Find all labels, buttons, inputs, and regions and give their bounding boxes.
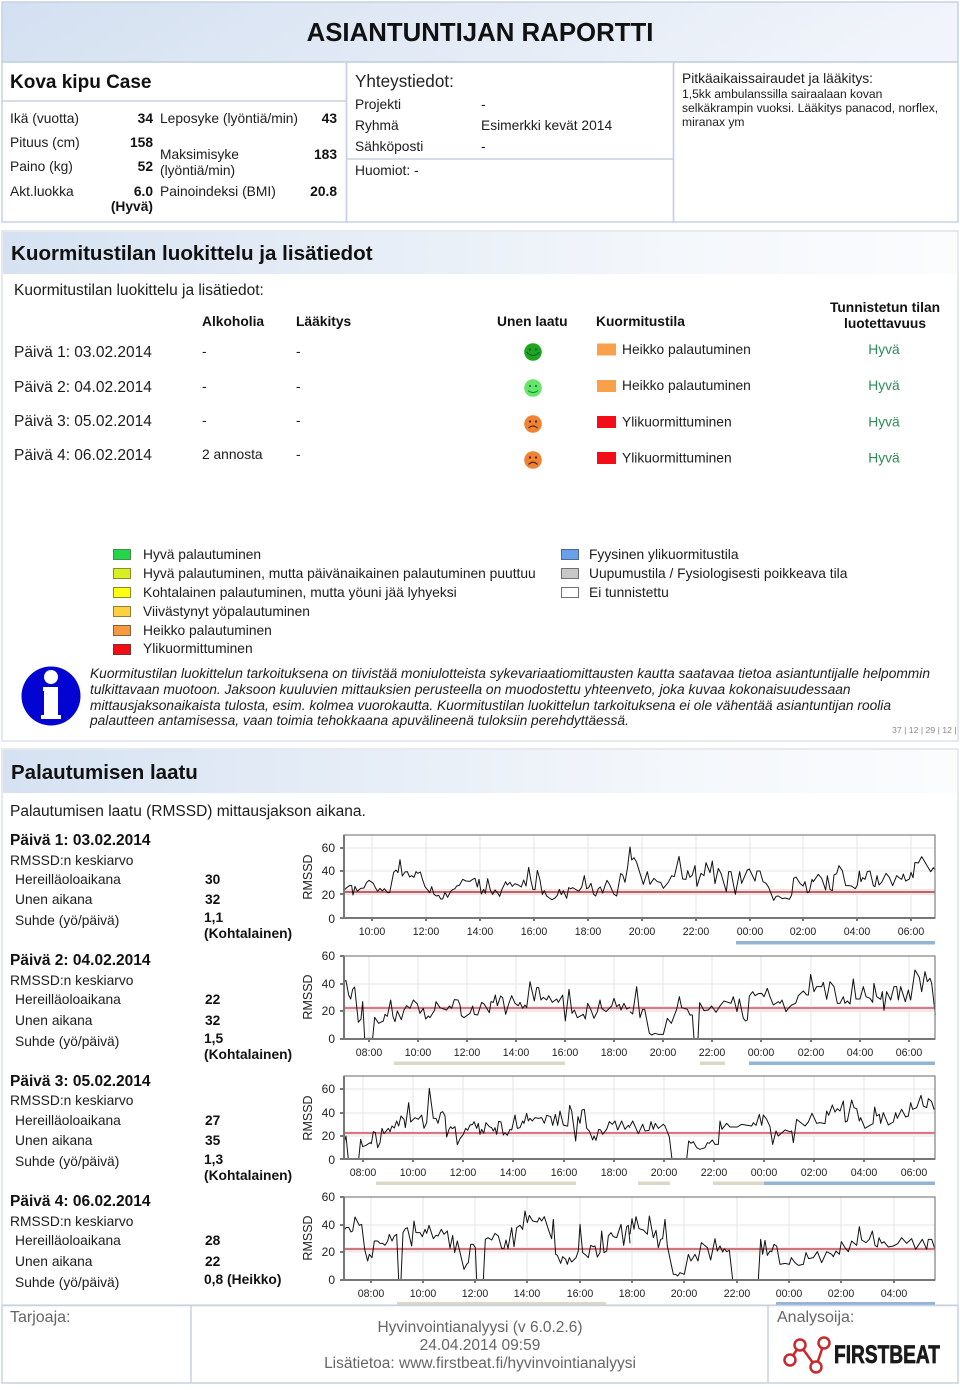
chart: day 4 RMSSD: 10:00: [410, 1288, 436, 1300]
email: Sähköposti: [355, 139, 423, 154]
maximum heart rate: Maksimisyke: [160, 147, 239, 162]
chart: day 2 RMSSD: RMSSD: [301, 974, 315, 1020]
body mass index: Painoindeksi (BMI): [160, 184, 276, 199]
row: day 1: -: [202, 344, 207, 359]
chart: day 3 RMSSD: 04:00: [851, 1167, 877, 1179]
chart: day 1 RMSSD: 20: [322, 888, 335, 902]
day 2 values: [10, 952, 292, 1062]
chart: day 2 RMSSD: 02:00: [798, 1047, 824, 1059]
day 4 values: Unen aikana: [15, 1254, 93, 1269]
maximum heart rate: [160, 147, 337, 178]
legend: recovery states: Viivästynyt yöpalautuminen: [143, 604, 310, 619]
panel: person details: [2, 62, 346, 222]
chart: day 3 RMSSD: 40: [322, 1106, 335, 1120]
section heading: Kuormitustilan luokittelu ja lisätiedot: [11, 242, 373, 265]
row: day 3: Ylikuormittuminen: [622, 414, 732, 430]
activity class: (Hyvä): [111, 199, 153, 214]
row: day 2: Päivä 2: 04.02.2014: [14, 379, 152, 396]
chart: day 2 RMSSD: 0: [328, 1032, 335, 1046]
row: day 3: [14, 413, 900, 433]
day 2 values: Unen aikana: [15, 1013, 93, 1028]
row: day 1: Päivä 1: 03.02.2014: [14, 344, 152, 361]
chart: day 4 RMSSD: 04:00: [881, 1288, 907, 1300]
day 3 values: RMSSD:n keskiarvo: [10, 1093, 134, 1108]
day 2 values: Hereilläoloaikana: [15, 992, 121, 1007]
chart: day 3 RMSSD: [301, 1076, 935, 1185]
report header: [2, 2, 958, 62]
chart: day 3 RMSSD: 08:00: [350, 1167, 376, 1179]
project: [355, 97, 486, 112]
section heading: Palautumisen laatu: [11, 761, 198, 784]
software information: [324, 1319, 636, 1372]
row: day 1: -: [296, 344, 301, 359]
table column headers: Alkoholia: [202, 314, 264, 329]
row: day 1: Hyvä: [868, 342, 900, 357]
chart: day 2 RMSSD: 20:00: [650, 1047, 676, 1059]
day 2 values: 1,5: [204, 1031, 224, 1046]
body mass index: [160, 184, 337, 199]
day 1 values: 30: [205, 872, 221, 887]
legend: other states: Uupumustila / Fysiologisesti poikkeava tila: [589, 566, 848, 581]
row: day 4: Ylikuormittuminen: [622, 450, 732, 466]
chart: day 1 RMSSD: 06:00: [898, 926, 924, 938]
legend: recovery states: Heikko palautuminen: [143, 623, 272, 638]
resting heart rate: 43: [322, 111, 337, 126]
height: 158: [130, 135, 153, 150]
activity class: Akt.luokka: [10, 184, 74, 199]
chart: day 1 RMSSD: 40: [322, 864, 335, 878]
row: day 2: -: [202, 379, 207, 394]
legend: recovery states: Hyvä palautuminen: [143, 547, 261, 562]
day 3 values: [10, 1073, 292, 1183]
weight: Paino (kg): [10, 159, 73, 174]
legend: other states: Fyysinen ylikuormitustila: [589, 547, 739, 562]
row: day 4: Päivä 4: 06.02.2014: [14, 447, 152, 464]
chart: day 3 RMSSD: 22:00: [701, 1167, 727, 1179]
illnesses text: [682, 87, 938, 129]
section subheading: Kuormitustilan luokittelu ja lisätiedot:: [14, 282, 264, 299]
software information: Hyvinvointianalyysi (v 6.0.2.6): [377, 1319, 583, 1336]
chart: day 1 RMSSD: 12:00: [413, 926, 439, 938]
day 3 values: Hereilläoloaikana: [15, 1113, 121, 1128]
chart: day 4 RMSSD: 00:00: [776, 1288, 802, 1300]
chart: day 3 RMSSD: 18:00: [601, 1167, 627, 1179]
chart: day 3 RMSSD: 12:00: [450, 1167, 476, 1179]
row: day 2: Hyvä: [868, 378, 900, 393]
table column headers: Kuormitustila: [596, 314, 685, 329]
chart: day 2 RMSSD: 04:00: [847, 1047, 873, 1059]
day 1 values: 32: [205, 892, 221, 907]
chart: day 4 RMSSD: 18:00: [619, 1288, 645, 1300]
table column headers: luotettavuus: [844, 316, 926, 331]
project: -: [481, 97, 486, 112]
body mass index: 20.8: [310, 184, 337, 199]
row: day 3: -: [296, 413, 301, 428]
day 4 values: RMSSD:n keskiarvo: [10, 1214, 134, 1229]
information text: Kuormitustilan luokittelun tarkoituksena on tiivistää moniulotteista sykevariaatiomittausten kautta saatavaa tietoa asiantuntijalle helpommin: [90, 666, 930, 681]
panel: chronic illnesses and medication: [674, 62, 958, 222]
day 4 values: Hereilläoloaikana: [15, 1233, 121, 1248]
chart: day 3 RMSSD: 00:00: [751, 1167, 777, 1179]
day 4 values: Suhde (yö/päivä): [15, 1275, 119, 1290]
chart: day 1 RMSSD: 20:00: [629, 926, 655, 938]
chart: day 3 RMSSD: 02:00: [801, 1167, 827, 1179]
project: Projekti: [355, 97, 401, 112]
chart: day 2 RMSSD: 08:00: [356, 1047, 382, 1059]
row: day 2: Heikko palautuminen: [622, 378, 751, 393]
row: day 2: -: [296, 379, 301, 394]
day 3 values: Suhde (yö/päivä): [15, 1154, 119, 1169]
legend: recovery states: Ylikuormittuminen: [143, 641, 253, 656]
footer: [2, 1306, 958, 1383]
row: day 2: [14, 378, 900, 397]
group: Ryhmä: [355, 118, 399, 133]
chart: day 4 RMSSD: 20: [322, 1245, 335, 1259]
height: Pituus (cm): [10, 135, 80, 150]
chart: day 3 RMSSD: 20: [322, 1129, 335, 1143]
group: [355, 118, 612, 133]
chart: day 2 RMSSD: 18:00: [601, 1047, 627, 1059]
chart: day 3 RMSSD: 0: [328, 1153, 335, 1167]
day 1 values: [10, 832, 292, 941]
day 1 values: Suhde (yö/päivä): [15, 913, 119, 928]
row: day 4: [14, 447, 900, 469]
illnesses heading: Pitkäaikaissairaudet ja lääkitys:: [682, 71, 873, 86]
day 1 values: Hereilläoloaikana: [15, 872, 121, 887]
chart: day 1 RMSSD: 16:00: [521, 926, 547, 938]
age: [10, 111, 153, 126]
table column headers: Tunnistetun tilan: [830, 300, 940, 315]
information text: [89, 666, 930, 728]
day 3 values: 1,3: [204, 1152, 224, 1167]
row: day 4: 2 annosta: [202, 447, 263, 462]
weight: 52: [138, 159, 153, 174]
day 3 values: (Kohtalainen): [204, 1168, 292, 1183]
chart: day 1 RMSSD: 22:00: [683, 926, 709, 938]
chart: day 3 RMSSD: RMSSD: [301, 1095, 315, 1141]
day 4 values: 28: [205, 1233, 221, 1248]
chart: day 2 RMSSD: 00:00: [748, 1047, 774, 1059]
day 3 values: 27: [205, 1113, 221, 1128]
day 1 values: (Kohtalainen): [204, 926, 292, 941]
table column headers: [202, 300, 940, 331]
logo: Firstbeat: [784, 1338, 940, 1372]
chart: day 3 RMSSD: 60: [322, 1082, 335, 1096]
chart: day 2 RMSSD: 10:00: [405, 1047, 431, 1059]
chart: day 2 RMSSD: 06:00: [896, 1047, 922, 1059]
chart: day 2 RMSSD: 12:00: [454, 1047, 480, 1059]
chart: day 2 RMSSD: 60: [322, 949, 335, 963]
day 1 values: Päivä 1: 03.02.2014: [10, 832, 151, 849]
day 2 values: (Kohtalainen): [204, 1047, 292, 1062]
chart: day 2 RMSSD: 22:00: [699, 1047, 725, 1059]
chart: day 1 RMSSD: 60: [322, 841, 335, 855]
chart: day 2 RMSSD: 20: [322, 1004, 335, 1018]
day 1 values: RMSSD:n keskiarvo: [10, 853, 134, 868]
chart: day 1 RMSSD: 00:00: [737, 926, 763, 938]
day 1 values: Unen aikana: [15, 892, 93, 907]
panel: stress state classification: [2, 231, 958, 741]
information text: tulkittavaan muotoon. Jaksoon kuuluvien mittauksien perusteella on muodostettu yhteenveto, joka kuvaa kokonaisuudessaan: [90, 682, 851, 697]
activity class: 6.0: [134, 184, 153, 199]
chart: day 1 RMSSD: 10:00: [359, 926, 385, 938]
chart: day 1 RMSSD: [301, 835, 935, 944]
age: 34: [138, 111, 153, 126]
contact heading: Yhteystiedot:: [355, 72, 454, 91]
chart: day 1 RMSSD: 02:00: [790, 926, 816, 938]
chart: day 4 RMSSD: 22:00: [724, 1288, 750, 1300]
row: day 3: Päivä 3: 05.02.2014: [14, 413, 152, 430]
software information: Lisätietoa: www.firstbeat.fi/hyvinvointianalyysi: [324, 1355, 636, 1372]
chart: day 3 RMSSD: 20:00: [651, 1167, 677, 1179]
day 4 values: Päivä 4: 06.02.2014: [10, 1193, 151, 1210]
legend: other states: Ei tunnistettu: [589, 585, 669, 600]
chart: day 2 RMSSD: 14:00: [503, 1047, 529, 1059]
chart: day 4 RMSSD: 20:00: [671, 1288, 697, 1300]
day 4 values: 22: [205, 1254, 221, 1269]
day 4 values: [10, 1193, 281, 1290]
chart: day 1 RMSSD: 0: [328, 912, 335, 926]
row: day 3: -: [202, 413, 207, 428]
row: day 4: Hyvä: [868, 450, 900, 466]
day 2 values: 32: [205, 1013, 221, 1028]
notes: Huomiot: -: [355, 163, 419, 178]
email: -: [481, 139, 486, 154]
legend: recovery states: Kohtalainen palautuminen, mutta yöuni jää lyhyeksi: [143, 585, 457, 600]
day 3 values: Päivä 3: 05.02.2014: [10, 1073, 151, 1090]
legend: other states: [562, 547, 848, 600]
chart: day 4 RMSSD: 40: [322, 1218, 335, 1232]
chart: day 4 RMSSD: 08:00: [358, 1288, 384, 1300]
chart: day 3 RMSSD: 06:00: [901, 1167, 927, 1179]
chart: day 4 RMSSD: 16:00: [567, 1288, 593, 1300]
day 1 values: 1,1: [204, 910, 224, 925]
height: [10, 135, 153, 150]
panel: recovery quality: [2, 749, 958, 1306]
illnesses text: 1,5kk ambulanssilla sairaalaan kovan: [682, 87, 882, 101]
title: ASIANTUNTIJAN RAPORTTI: [307, 19, 653, 47]
percent distribution note: 37 | 12 | 29 | 12 |: [892, 725, 957, 735]
table column headers: Lääkitys: [296, 314, 352, 329]
chart: day 2 RMSSD: 16:00: [552, 1047, 578, 1059]
chart: day 4 RMSSD: 12:00: [462, 1288, 488, 1300]
chart: day 4 RMSSD: [301, 1190, 935, 1306]
chart: day 2 RMSSD: 40: [322, 977, 335, 991]
chart: day 3 RMSSD: 14:00: [500, 1167, 526, 1179]
chart: day 1 RMSSD: 14:00: [467, 926, 493, 938]
day 2 values: RMSSD:n keskiarvo: [10, 973, 134, 988]
chart: day 4 RMSSD: 60: [322, 1190, 335, 1204]
information text: mittausjaksonaikaista tulosta, esim. kolmea vuorokautta. Kuormitustilan luokittelun tarkoituksena ei ole vähentää asiantuntijan roolia: [90, 698, 891, 713]
chart: day 3 RMSSD: 10:00: [400, 1167, 426, 1179]
chart: day 1 RMSSD: 18:00: [575, 926, 601, 938]
legend: recovery states: [114, 547, 536, 656]
day 2 values: 22: [205, 992, 221, 1007]
analyst label: Analysoija:: [777, 1309, 854, 1326]
chart: day 4 RMSSD: 14:00: [514, 1288, 540, 1300]
chart: day 1 RMSSD: RMSSD: [301, 854, 315, 900]
chart: day 4 RMSSD: RMSSD: [301, 1215, 315, 1261]
row: day 1: Heikko palautuminen: [622, 342, 751, 357]
weight: [10, 159, 153, 174]
legend: recovery states: Hyvä palautuminen, mutta päivänaikainen palautuminen puuttuu: [143, 566, 536, 581]
chart: day 4 RMSSD: 02:00: [828, 1288, 854, 1300]
chart: day 1 RMSSD: 04:00: [844, 926, 870, 938]
table column headers: Unen laatu: [497, 314, 568, 329]
chart: day 2 RMSSD: [301, 949, 935, 1065]
group: Esimerkki kevät 2014: [481, 118, 612, 133]
maximum heart rate: 183: [314, 147, 337, 162]
chart: day 3 RMSSD: 16:00: [551, 1167, 577, 1179]
illnesses text: selkäkrampin vuoksi. Lääkitys panacod, norflex,: [682, 101, 938, 115]
maximum heart rate: (lyöntiä/min): [160, 163, 235, 178]
email: [355, 139, 486, 154]
resting heart rate: Leposyke (lyöntiä/min): [160, 111, 298, 126]
day 2 values: Suhde (yö/päivä): [15, 1034, 119, 1049]
age: Ikä (vuotta): [10, 111, 79, 126]
information text: palautteen antamisessa, vaan toimia tehokkaana apuvälineenä tuloksiin perehdyttäessä.: [89, 713, 629, 728]
illnesses text: miranax ym: [682, 115, 744, 129]
icon: information: [22, 666, 80, 726]
day 4 values: 0,8 (Heikko): [204, 1272, 281, 1287]
row: day 3: Hyvä: [868, 414, 900, 430]
row: day 1: [14, 342, 900, 361]
section subheading: Palautumisen laatu (RMSSD) mittausjakson aikana.: [10, 803, 366, 820]
chart: day 4 RMSSD: 0: [328, 1273, 335, 1287]
day 3 values: 35: [205, 1133, 221, 1148]
software information: 24.04.2014 09:59: [420, 1337, 540, 1354]
day 3 values: Unen aikana: [15, 1133, 93, 1148]
row: day 4: -: [296, 447, 301, 462]
provider label: Tarjoaja:: [10, 1309, 70, 1326]
panel: contact details: [346, 62, 674, 222]
person name heading: Kova kipu Case: [10, 72, 152, 93]
activity class: [10, 184, 153, 214]
day 2 values: Päivä 2: 04.02.2014: [10, 952, 151, 969]
